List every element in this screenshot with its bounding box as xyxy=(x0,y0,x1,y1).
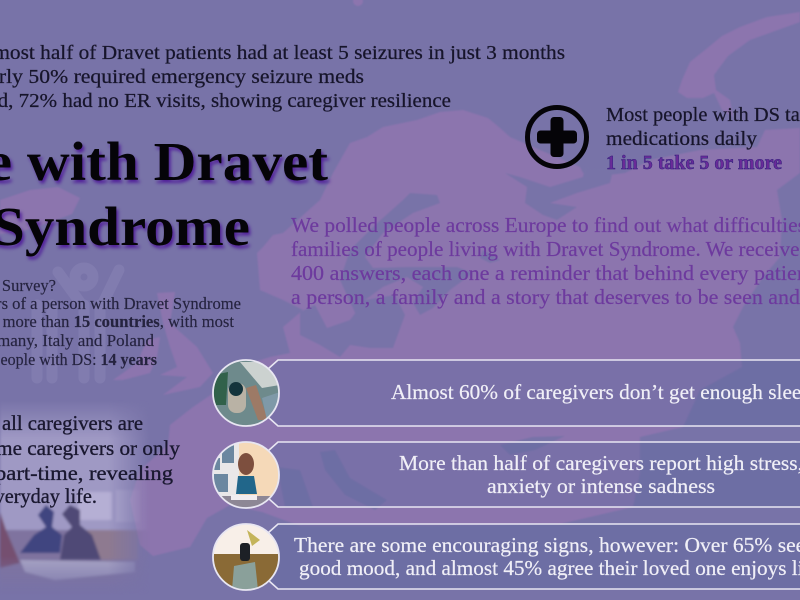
photo hair and face xyxy=(238,453,254,475)
figure heads xyxy=(75,268,93,286)
map: Irish island xyxy=(113,337,160,380)
survey details xyxy=(0,276,241,369)
intro line three: 400 answers, each one a reminder that behind every patient xyxy=(291,261,800,285)
map: Mediterranean dark lobe xyxy=(277,467,313,507)
photo window panes two xyxy=(116,490,125,522)
card shape xyxy=(268,360,800,426)
circle frame xyxy=(213,442,279,508)
sleep text: Almost 60% of caregivers don’t get enough sleep xyxy=(391,380,800,404)
photo wall xyxy=(239,442,278,496)
photo coffee xyxy=(229,382,243,396)
photo person right xyxy=(60,505,101,560)
photo mug xyxy=(228,383,246,413)
map: northern Scandinavia band xyxy=(678,12,800,117)
map: small island top xyxy=(353,0,363,6)
photo person left xyxy=(0,512,20,568)
figure two body xyxy=(84,305,100,378)
photo books xyxy=(214,445,234,492)
map: small eastern inlet xyxy=(480,250,500,263)
card shape xyxy=(268,442,800,507)
icon ring xyxy=(528,108,586,166)
icon cross horizontal xyxy=(537,130,577,144)
figure two arms xyxy=(58,270,119,305)
intro line two: families of people living with Dravet Syndrome. We received xyxy=(291,237,800,261)
panel: stress xyxy=(212,442,800,510)
photo book xyxy=(240,362,280,388)
photo child xyxy=(240,543,250,561)
photo window panes xyxy=(78,492,112,520)
photo background window xyxy=(0,408,141,532)
map: inner seas xyxy=(277,167,613,510)
circle frame xyxy=(213,524,279,590)
stress text line one: More than half of caregivers report high stress, xyxy=(399,451,800,475)
icon: medical cross xyxy=(528,108,586,166)
photo bookshelf xyxy=(212,442,239,497)
map: North Sea lobe xyxy=(300,295,405,357)
map: Baltic lobe xyxy=(340,193,473,317)
medication highlight: 1 in 5 take 5 or more xyxy=(606,152,782,174)
photo: kite and child xyxy=(212,524,280,592)
photo person middle xyxy=(20,505,62,553)
photo kite xyxy=(247,530,260,546)
map: Italy xyxy=(320,450,387,510)
icon: faint people figures xyxy=(37,268,119,378)
card border xyxy=(268,442,800,507)
photo paper xyxy=(231,495,257,500)
medication line two: medications daily xyxy=(606,128,758,150)
medication text xyxy=(606,104,800,174)
card border xyxy=(268,524,800,589)
map: British island xyxy=(157,292,213,395)
photo: stressed woman xyxy=(212,442,280,510)
photo adult xyxy=(232,562,258,590)
map: northern land left xyxy=(0,187,80,234)
card border xyxy=(268,360,800,426)
panel: sleep xyxy=(212,360,800,426)
photo wood wall xyxy=(88,530,128,560)
photo field xyxy=(214,554,278,587)
card shape xyxy=(268,524,800,589)
intro line one: We polled people across Europe to find out what difficulties xyxy=(291,213,800,237)
encouraging text line two: good mood, and almost 45% agree their loved one enjoys life xyxy=(299,556,800,580)
photo plant xyxy=(213,372,228,405)
photo table xyxy=(20,560,135,580)
photo: coffee cup xyxy=(212,360,280,426)
map: mainland xyxy=(130,110,800,556)
photo body xyxy=(236,476,257,494)
stress text line two: anxiety or intense sadness xyxy=(487,474,715,498)
map: southern gulf xyxy=(505,167,613,220)
intro paragraph xyxy=(291,213,800,309)
circle frame xyxy=(213,360,279,426)
figure one body xyxy=(37,305,52,378)
title xyxy=(0,131,329,257)
photo arm xyxy=(246,385,268,420)
key statistics text xyxy=(0,42,565,112)
map: Black Sea inlet xyxy=(500,436,565,455)
photo: caregivers at a table xyxy=(0,408,141,580)
intro line four: a person, a family and a story that deserves to be seen and xyxy=(291,285,800,309)
photo blanket xyxy=(262,392,278,418)
caregiver callout xyxy=(0,411,180,508)
encouraging text line one: There are some encouraging signs, however: Over 65% seem xyxy=(294,533,800,557)
photo backdrop xyxy=(216,361,278,425)
panel: encouraging signs xyxy=(212,524,800,592)
photo floor xyxy=(222,496,270,508)
photo lower room xyxy=(6,529,141,558)
icon cross vertical xyxy=(550,117,564,157)
photo sky xyxy=(214,524,278,554)
